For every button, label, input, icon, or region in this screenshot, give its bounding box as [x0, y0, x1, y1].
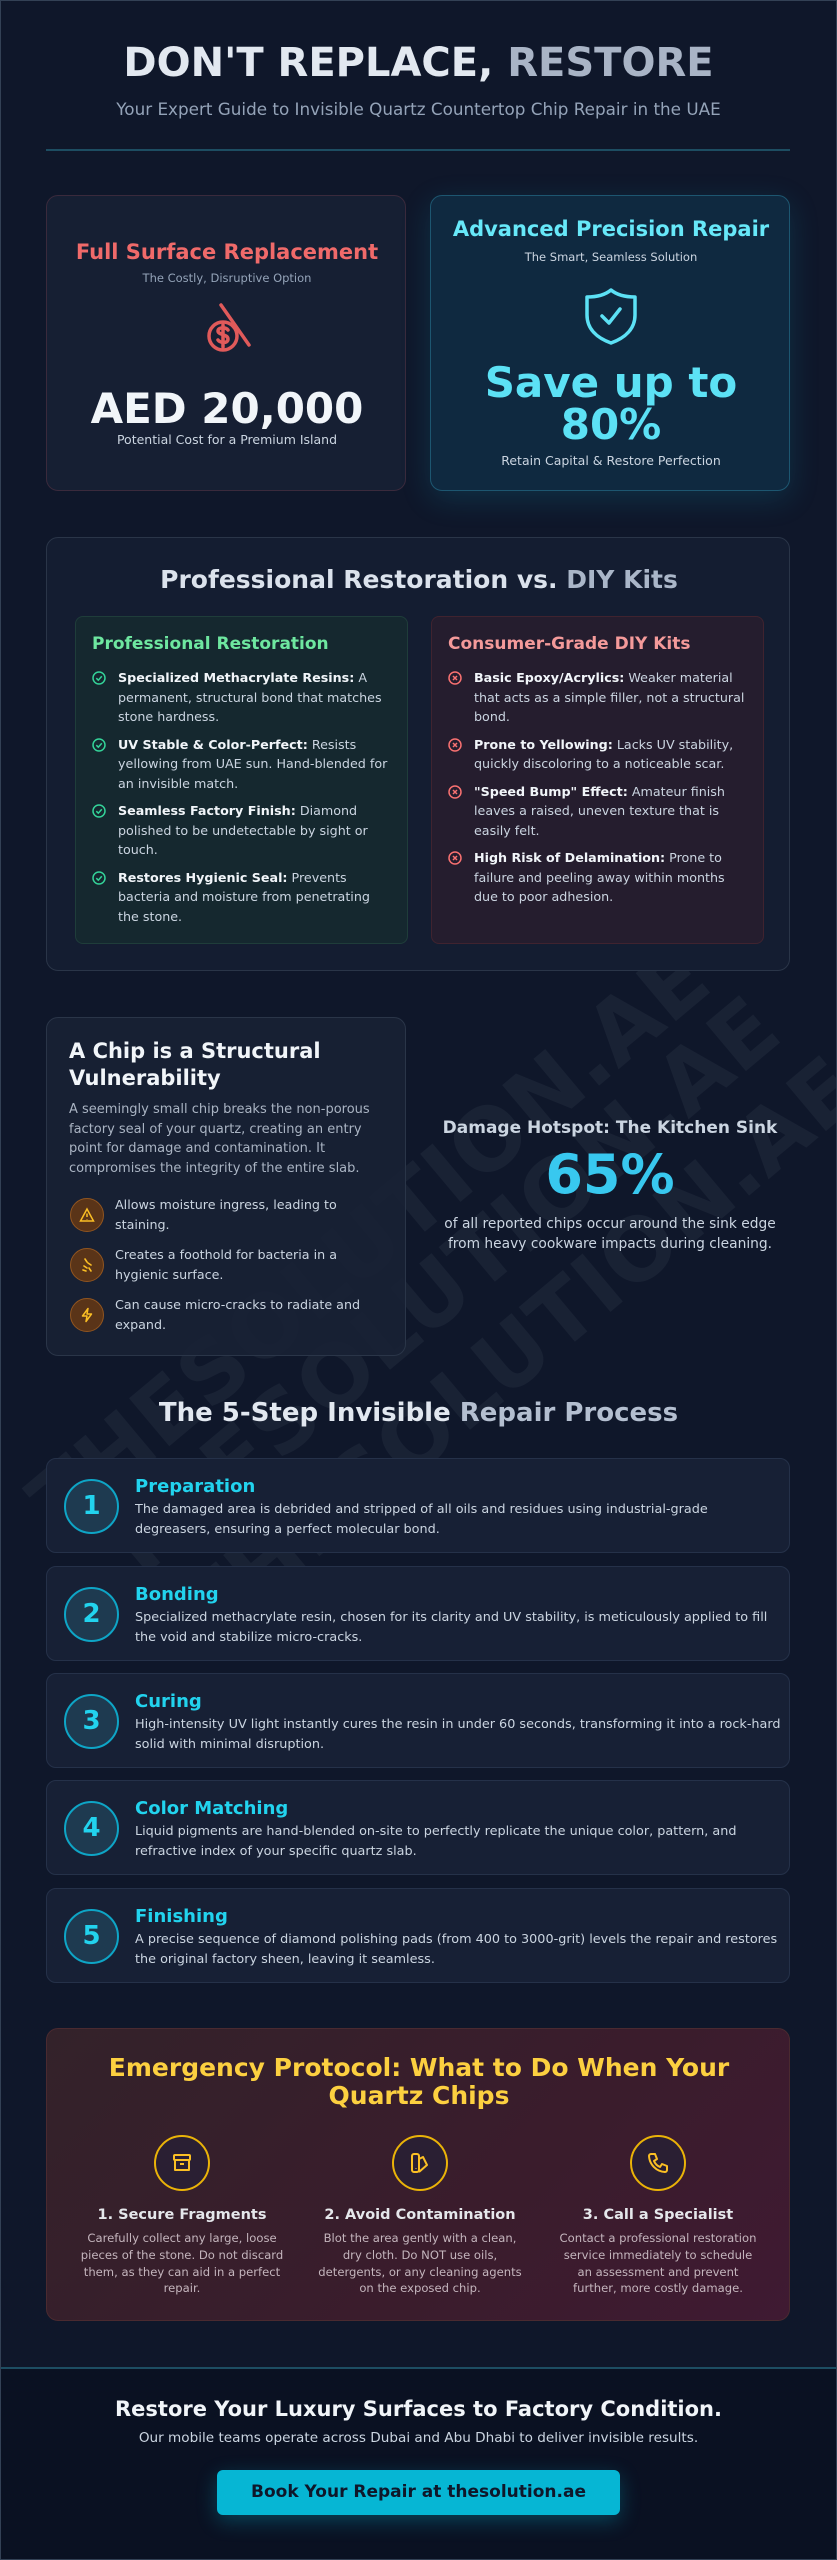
title: DON'T REPLACE, RESTORE — [123, 40, 714, 86]
step 1: 1 — [82, 1491, 101, 1521]
column: diy — [431, 616, 764, 944]
emergency step 2 — [318, 2135, 522, 2295]
step 4: 4 — [82, 1813, 101, 1843]
heading: emergency: Emergency Protocol: What to Do When Your — [109, 2053, 729, 2082]
panel: full surface replacement: Potential Cost for a Premium Island — [117, 432, 337, 447]
column: diy: Prone to Yellowing: Lacks UV stability, quickly discoloring to a noticeable scar. — [474, 736, 733, 771]
step 4: Color Matching — [135, 1798, 288, 1819]
step 4: Liquid pigments are hand-blended on-site to perfectly replicate the unique color, pattern, and refractive index of your specific quartz slab. — [135, 1824, 736, 1858]
text: bacteria: Creates a foothold for bacteria in a hygienic surface. — [115, 1247, 337, 1282]
step 5 — [46, 1888, 790, 1983]
footer text: Our mobile teams operate across Dubai and Abu Dhabi to deliver invisible results. — [139, 2430, 698, 2446]
button: book repair: Book Your Repair at thesolution.ae — [251, 2482, 586, 2502]
button: book repair — [217, 2470, 620, 2515]
step 3: Curing — [135, 1691, 202, 1712]
text: cracks: Can cause micro-cracks to radiate and expand. — [115, 1297, 360, 1332]
step 2: Bonding — [135, 1584, 219, 1605]
column: professional: Specialized Methacrylate Resins: A permanent, structural bond that matches stone hardness. — [118, 670, 382, 724]
panel: full surface replacement — [46, 195, 406, 491]
stat: kitchen sink hotspot: 65% — [545, 1143, 675, 1206]
icon: crossed dollar — [207, 303, 251, 352]
step 3: 3 — [82, 1706, 101, 1736]
icon: bacteria — [70, 1248, 104, 1282]
panel: full surface replacement: The Costly, Disruptive Option — [143, 271, 311, 285]
text: vulnerability body: A seemingly small chip breaks the non-porous factory seal of your quartz, creating an entry point for damage and contamination. It compromises the integrity of the entire slab. — [69, 1102, 370, 1176]
heading: emergency — [109, 2053, 730, 2110]
step 5: 5 — [82, 1921, 101, 1951]
step 2 — [46, 1566, 790, 1661]
emergency step 2: Blot the area gently with a clean, dry cloth. Do NOT use oils, detergents, or any cleaning agents on the exposed chip. — [318, 2231, 522, 2295]
step 5: Finishing — [135, 1906, 228, 1927]
emergency step 3: Contact a professional restoration service immediately to schedule an assessment and prevent further, more costly damage. — [560, 2231, 756, 2295]
footer — [0, 2367, 837, 2560]
heading: vulnerability: A Chip is a Structural Vulnerability — [69, 1039, 321, 1090]
heading: emergency: Quartz Chips — [329, 2081, 509, 2110]
step 4 — [46, 1780, 790, 1875]
stat: save 80%: 80% — [561, 400, 661, 449]
step 1 — [46, 1458, 790, 1553]
step 1: The damaged area is debrided and stripped of all oils and residues using industrial-grade degreasers, ensuring a perfect molecular bond. — [135, 1502, 708, 1536]
emergency step 1: Carefully collect any large, loose pieces of the stone. Do not discard them, as they can aid in a perfect repair. — [81, 2231, 283, 2295]
column: professional: Professional Restoration — [92, 634, 329, 654]
heading: replacement: Full Surface Replacement — [76, 240, 378, 264]
stat: kitchen sink hotspot — [443, 1118, 778, 1252]
heading: comparison: Professional Restoration vs. DIY Kits — [160, 565, 678, 594]
heading: precision: Advanced Precision Repair — [453, 217, 769, 241]
stat: save 80%: Save up to — [485, 358, 737, 407]
column: diy: Consumer-Grade DIY Kits — [448, 634, 690, 654]
footer heading: Restore Your Luxury Surfaces to Factory Condition. — [115, 2397, 722, 2421]
emergency step 3: 3. Call a Specialist — [583, 2207, 733, 2223]
panel: comparison — [46, 537, 790, 971]
watermark: THESOLUTION.AE — [81, 977, 799, 1603]
column: diy: High Risk of Delamination: Prone to failure and peeling away within months due to poor adhesion. — [474, 850, 725, 904]
stat: kitchen sink hotspot: of all reported chips occur around the sink edge from heavy cookware impacts during cleaning. — [444, 1216, 776, 1252]
stat: save 80% — [485, 358, 737, 449]
step 3: High-intensity UV light instantly cures the resin in under 60 seconds, transforming it into a rock-hard solid with minimal disruption. — [135, 1717, 781, 1752]
column: diy: Basic Epoxy/Acrylics: Weaker material that acts as a simple filler, not a structural bond. — [474, 670, 744, 724]
watermark: THESOLUTION.AE — [11, 927, 729, 1553]
step 2: Specialized methacrylate resin, chosen for its clarity and UV stability, is meticulously applied to fill the void and stabilize micro-cracks. — [135, 1610, 767, 1644]
column: professional: Seamless Factory Finish: Diamond polished to be undetectable by sight or touch. — [118, 803, 368, 857]
column: professional: UV Stable & Color-Perfect: Resists yellowing from UAE sun. Hand-blended for an invisible match. — [118, 736, 387, 790]
icon: shield check — [585, 288, 637, 345]
stat: AED 20,000: AED 20,000 — [91, 384, 363, 433]
step 1: Preparation — [135, 1476, 255, 1497]
icon: warning — [70, 1198, 104, 1232]
step 3 — [46, 1673, 790, 1768]
icon: lightning — [70, 1298, 104, 1332]
step 2: 2 — [82, 1599, 101, 1629]
panel: structural vulnerability — [46, 1017, 406, 1356]
column: diy: "Speed Bump" Effect: Amateur finish leaves a raised, uneven texture that is easily felt. — [474, 784, 725, 838]
subtitle: Your Expert Guide to Invisible Quartz Countertop Chip Repair in the UAE — [116, 99, 721, 119]
panel: emergency protocol — [46, 2028, 790, 2321]
panel: precision repair: The Smart, Seamless Solution — [525, 250, 697, 264]
panel: precision repair: Retain Capital & Restore Perfection — [501, 453, 721, 468]
panel: precision repair — [430, 195, 790, 491]
emergency step 1: 1. Secure Fragments — [98, 2207, 266, 2223]
stat: kitchen sink hotspot: Damage Hotspot: The Kitchen Sink — [443, 1118, 777, 1138]
emergency step 1 — [81, 2135, 283, 2295]
column: professional: Restores Hygienic Seal: Prevents bacteria and moisture from penetrating the stone. — [118, 870, 370, 924]
text: moisture: Allows moisture ingress, leading to staining. — [115, 1197, 337, 1232]
emergency step 3 — [560, 2135, 756, 2295]
emergency step 2: 2. Avoid Contamination — [324, 2207, 516, 2223]
column: professional — [75, 616, 408, 944]
step 5: A precise sequence of diamond polishing pads (from 400 to 3000-grit) levels the repair and restores the original factory sheen, leaving it seamless. — [135, 1932, 777, 1966]
heading: 5-step process: The 5-Step Invisible Repair Process — [159, 1398, 678, 1428]
